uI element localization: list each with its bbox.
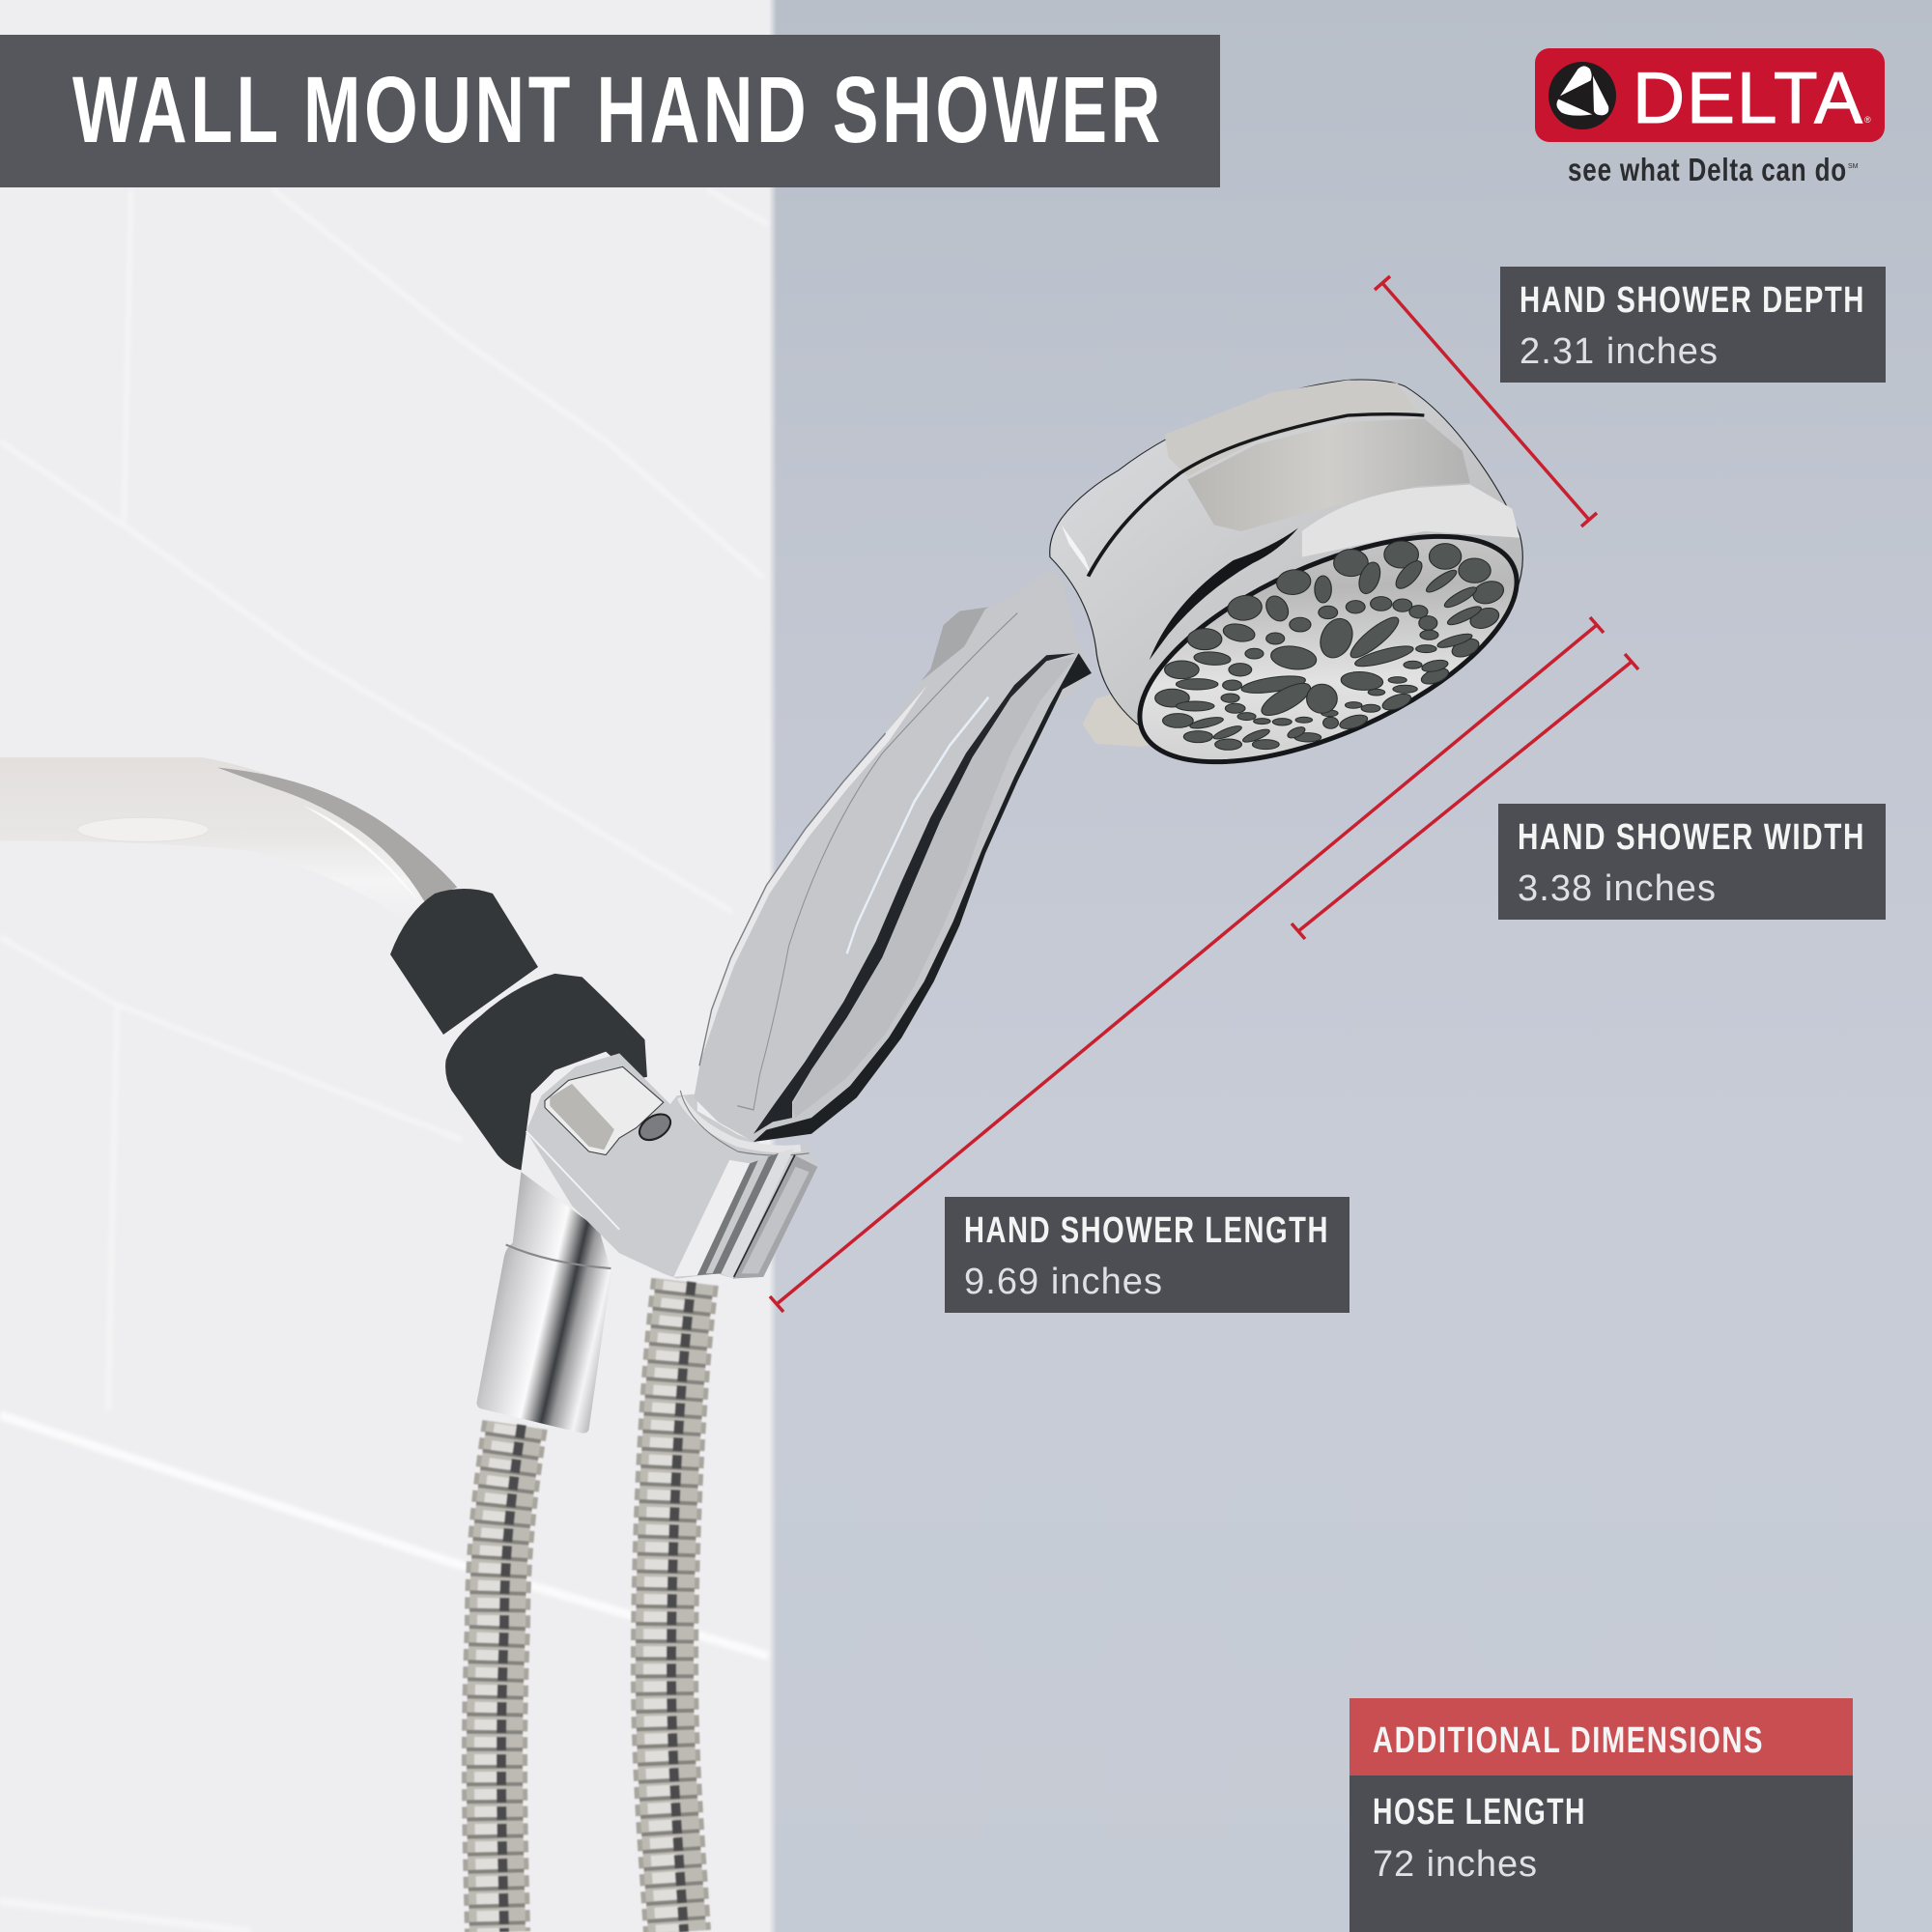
logo wordmark: DELTA (1633, 57, 1862, 138)
logo tagline: see what Delta can do (1568, 152, 1847, 187)
hand shower handle (694, 569, 1092, 1142)
handle highlight (847, 697, 988, 953)
icon: Delta triangle mark (1548, 62, 1616, 129)
head satin band top (1165, 380, 1416, 476)
head body (1050, 380, 1522, 763)
panel: additional dimensions: 72 inches (1373, 1844, 1537, 1885)
white shower arm (0, 757, 457, 922)
panel: hand shower width (1498, 804, 1886, 920)
bracket ribs (673, 1149, 817, 1279)
head dark groove (1088, 414, 1424, 577)
chrome bracket body (526, 1053, 817, 1279)
dimension line: depth (1375, 276, 1597, 526)
head chrome highlight (1062, 525, 1092, 577)
spray holes (1155, 541, 1508, 750)
hose: left, attached to connector (486, 1425, 522, 1932)
head lower fin (1083, 693, 1165, 747)
black connector nut upper (390, 889, 538, 1035)
face plate (1109, 490, 1548, 809)
head lower shoulder (1302, 485, 1520, 557)
lower chrome connector (476, 1172, 611, 1434)
handle lower dark edge (753, 653, 1092, 1142)
panel: hand shower width: 3.38 inches (1518, 868, 1716, 909)
wall bracket assembly (445, 974, 817, 1434)
dimension line: length (770, 617, 1604, 1312)
title text: WALL MOUNT HAND SHOWER (72, 57, 1164, 162)
handle lower panel (792, 657, 1075, 1118)
panel: hand shower length: HAND SHOWER LENGTH (964, 1210, 1329, 1251)
bracket window (545, 1066, 664, 1155)
Delta logo: SM (1848, 163, 1859, 170)
background: grey wall (763, 0, 1932, 1932)
panel: hand shower length (945, 1197, 1350, 1313)
handle rear fin (921, 607, 988, 681)
panel: hand shower length: 9.69 inches (964, 1262, 1162, 1302)
shower head (1050, 380, 1548, 809)
panel: hand shower depth: 2.31 inches (1520, 331, 1718, 372)
Delta logo: ® (1864, 115, 1871, 125)
background: white tile wall (0, 0, 777, 1932)
handle seat ring (680, 1097, 801, 1150)
title banner (0, 35, 1220, 187)
panel: additional dimensions (1350, 1698, 1853, 1932)
handle dark groove (753, 653, 1075, 1134)
handle body (694, 569, 1092, 1142)
dimension line: width (1292, 654, 1638, 939)
Delta logo (1535, 48, 1885, 187)
hose: right, attached to bracket (656, 1282, 692, 1932)
panel: hand shower depth (1500, 267, 1886, 383)
bracket pin (635, 1109, 675, 1146)
head satin band middle (1187, 418, 1470, 531)
black connector nut lower (445, 974, 647, 1170)
panel: additional dimensions: HOSE LENGTH (1373, 1792, 1586, 1833)
connector collar (506, 1245, 611, 1268)
panel: additional dimensions: ADDITIONAL DIMENSIONS (1373, 1720, 1764, 1761)
